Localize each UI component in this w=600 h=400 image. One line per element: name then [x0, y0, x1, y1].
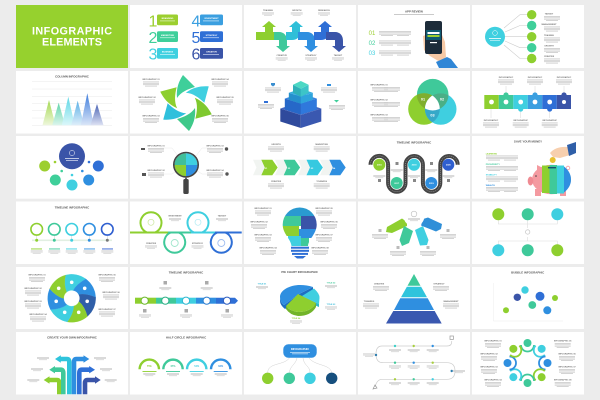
cyan arrow: [286, 21, 303, 36]
text blocks: INFOGRAPHIC 01: [28, 274, 47, 276]
labels: TITLE 03: [327, 304, 336, 306]
teal petal: [400, 226, 413, 246]
text blocks: INFOGRAPHIC 04: [211, 78, 230, 81]
text blocks: INFOGRAPHIC 07: [315, 234, 334, 236]
royal arrow: [314, 21, 332, 36]
milestones: 2020: [446, 164, 452, 166]
milestones: [141, 297, 231, 304]
labels: CREATIVE: [271, 180, 282, 183]
labels: [483, 76, 572, 128]
arrow band: [135, 298, 238, 304]
panel: pie chart: [244, 267, 356, 329]
labels: GROWTH: [271, 144, 281, 146]
text blocks: INFOGRAPHIC 06: [211, 114, 230, 118]
connectors: [498, 220, 557, 245]
text blocks: INFOGRAPHIC 01: [370, 84, 389, 86]
labels: CREATIVE: [146, 242, 157, 245]
loops: [130, 212, 242, 253]
text blocks: INFOGRAPHIC 04: [29, 313, 48, 316]
dots: [375, 345, 453, 380]
path: [375, 341, 455, 387]
bulb base: [291, 247, 309, 258]
heading: TIMELINE INFOGRAPHIC: [397, 140, 432, 144]
circles: [31, 224, 113, 242]
puzzle strip: [484, 92, 571, 112]
panel: winding road: [358, 332, 470, 394]
text blocks: INFOGRAPHIC 01: [254, 207, 273, 210]
panel: magnifier puzzle: [130, 136, 242, 199]
panel: circle timeline: [16, 202, 128, 264]
text blocks: INFOGRAPHIC 01: [142, 78, 161, 81]
connectors: [268, 357, 332, 372]
leaders: [491, 86, 564, 118]
labels: [268, 143, 330, 188]
nodes: [492, 208, 563, 256]
panel: puzzle timeline: [472, 71, 584, 134]
text blocks: INFOGRAPHIC 05: [315, 207, 334, 210]
labels: [142, 371, 228, 376]
panel: ring of arcs: [472, 332, 584, 394]
values: [147, 365, 224, 368]
text blocks: INFOGRAPHIC 02: [147, 169, 166, 172]
milestones: [373, 159, 454, 189]
heading: TIMELINE INFOGRAPHIC: [169, 270, 204, 274]
values: 67%: [171, 365, 176, 368]
labels: INFOGRAPHIC: [499, 76, 514, 79]
end icons: [373, 336, 453, 389]
labels: RESEARCH: [318, 9, 330, 12]
labels: TITLE 02: [327, 282, 336, 284]
text blocks: INFOGRAPHIC 01: [484, 340, 503, 342]
text blocks: INFOGRAPHIC 07: [558, 366, 577, 368]
item 1: [149, 14, 178, 30]
values: 75%: [147, 365, 153, 368]
text blocks: INFOGRAPHIC 02: [250, 220, 269, 224]
venn circles: 01: [421, 98, 425, 102]
labels: [31, 248, 113, 254]
labels: [27, 357, 117, 382]
labels: STRATEGY: [305, 54, 317, 57]
text blocks: INFOGRAPHIC 03: [24, 300, 43, 303]
labels: INFOGRAPHIC: [528, 76, 543, 79]
list: 03: [369, 51, 376, 57]
labels: INFOGRAPHIC: [542, 119, 557, 122]
milestones: 2018: [412, 164, 417, 166]
labels: INFOGRAPHIC: [557, 76, 572, 79]
panel: stepped pyramid: [244, 71, 356, 134]
tier 2: [401, 287, 427, 297]
green petal: [386, 218, 407, 233]
icon: coin and hand: [550, 142, 576, 163]
labels: TARGET: [218, 214, 227, 218]
item 3: BUSINESS: [162, 52, 174, 54]
text blocks: [370, 84, 400, 122]
hub: [59, 143, 85, 169]
icon: piggy bank: [528, 165, 571, 196]
labels: INVESTMENT: [168, 216, 182, 218]
item 4: INVESTMENT: [204, 18, 219, 20]
labels: TITLE 01: [258, 284, 267, 286]
text blocks: INFOGRAPHIC 06: [558, 352, 577, 356]
venn circles: 03: [430, 114, 435, 118]
panel: bubble chart: [472, 267, 584, 329]
item 3: 3: [149, 46, 158, 64]
venn circles: 02: [440, 98, 444, 102]
panel: numbered list: [130, 5, 242, 68]
labels: TOWARDS: [316, 180, 328, 183]
labels: TITLE 04: [292, 317, 301, 320]
icons: [148, 219, 225, 246]
arcs: [140, 360, 230, 369]
list: [486, 152, 518, 192]
text blocks: INFOGRAPHIC 02: [480, 352, 499, 356]
hub: [485, 27, 505, 47]
panel: loop timeline: [130, 202, 242, 264]
list: LEARNING: [486, 152, 497, 156]
labels: STRATEGY: [433, 282, 445, 286]
labels: CREATIVE: [374, 282, 385, 286]
donut segments: [40, 267, 102, 328]
green chevron: 01: [265, 168, 268, 170]
icons: [141, 147, 229, 176]
labels: MARKETING: [315, 143, 328, 146]
venn circles: [408, 79, 457, 125]
teal arrow: [274, 36, 290, 52]
child nodes: [262, 373, 337, 384]
heading: COLUMN INFOGRAPHIC: [55, 74, 90, 78]
item 6: [192, 46, 223, 64]
pinwheel blades: [157, 75, 215, 131]
text blocks: [147, 144, 225, 178]
pale chevrons: [253, 160, 336, 175]
teal chevron: 02: [288, 168, 291, 170]
text blocks: INFOGRAPHIC 01: [147, 144, 166, 148]
milestones: 2019: [429, 183, 435, 185]
tier 3: [394, 298, 434, 310]
text blocks: INFOGRAPHIC 05: [98, 274, 117, 276]
labels: INFOGRAPHIC: [484, 119, 499, 122]
labels: MANAGEMENT: [541, 23, 557, 26]
panel: segmented wheel: [16, 267, 128, 329]
panel: hub and spokes: [472, 5, 584, 68]
text blocks: INFOGRAPHIC 05: [554, 340, 572, 342]
centre circle: [404, 206, 424, 226]
labels: [256, 282, 337, 324]
labels: [139, 281, 233, 318]
road: [370, 156, 458, 192]
text blocks: [258, 83, 345, 110]
text blocks: [24, 274, 121, 322]
axes: [493, 283, 563, 321]
labels: [363, 282, 459, 308]
triangle columns: [42, 93, 104, 125]
leaders: [160, 148, 212, 174]
cyan chevron: 03: [311, 168, 314, 170]
labels: MANAGEMENT: [443, 300, 459, 303]
tier 4: [386, 311, 442, 324]
list: STABILITY: [486, 174, 497, 176]
centre icon: [526, 230, 530, 234]
navy arrow: [326, 36, 346, 52]
text blocks: INFOGRAPHIC 04: [206, 169, 225, 172]
icon: hand holding phone: [423, 21, 458, 68]
panel: pyramid: [358, 267, 470, 329]
heading: PIE CHART INFOGRAPHIC: [281, 270, 319, 274]
panel: title cover: [16, 5, 128, 68]
milestones: 2016: [377, 164, 383, 166]
heading: HALF CIRCLE INFOGRAPHIC: [166, 336, 207, 340]
text blocks: INFOGRAPHIC 03: [480, 366, 499, 368]
text blocks: INFOGRAPHIC 04: [484, 378, 503, 382]
layer 3: [285, 94, 317, 114]
item 1: BRANDING: [162, 17, 174, 20]
panel: column infographic: [16, 71, 128, 134]
text blocks: INFOGRAPHIC 02: [138, 96, 157, 99]
text blocks: INFOGRAPHIC 02: [24, 287, 43, 290]
item 1: 1: [149, 14, 158, 30]
item 2: [149, 30, 178, 47]
labels: [372, 229, 456, 256]
subtitle: ELEMENTS: [42, 36, 102, 48]
grid lines: [32, 81, 112, 125]
heading: TIMELINE INFOGRAPHIC: [55, 206, 90, 210]
labels: GROWTH: [292, 10, 302, 12]
labels: TOWARDS: [364, 300, 375, 303]
values: 62%: [218, 365, 224, 368]
list: WEALTH: [486, 184, 495, 187]
panel: pinwheel: [130, 71, 242, 134]
tier 1: [408, 274, 420, 286]
notes: [373, 162, 454, 182]
list: 01: [369, 31, 376, 37]
layer 4: [280, 102, 321, 128]
labels: [363, 349, 465, 385]
connectors: [504, 15, 527, 58]
item 6: 6: [192, 46, 201, 64]
labels: TARGET: [334, 54, 343, 57]
labels: [541, 12, 560, 64]
panel: puzzle bulb: [244, 202, 356, 264]
text blocks: [138, 78, 235, 123]
panel: road timeline: [358, 136, 470, 199]
text blocks: INFOGRAPHIC 06: [102, 291, 121, 294]
blue chevron: 04: [333, 167, 336, 170]
panel: piggy bank: [472, 136, 584, 199]
panel: arrows flow: [244, 5, 356, 68]
labels: CREATIVE: [544, 55, 555, 58]
subheading: [394, 14, 434, 15]
list: [369, 31, 411, 57]
ring: [504, 339, 552, 387]
panel: bubbles around hub: [16, 136, 128, 199]
text blocks: INFOGRAPHIC 03: [370, 114, 389, 116]
panel: grow arrows: [16, 332, 128, 394]
list: 02: [369, 41, 376, 47]
blue petal: [421, 218, 442, 232]
text blocks: INFOGRAPHIC 02: [370, 98, 389, 102]
heading: CREATE YOUR OWN INFOGRAPHIC: [47, 336, 98, 340]
arrow heads: [44, 355, 101, 384]
green arrow: [256, 21, 276, 40]
top node: INFOGRAPHIC: [291, 347, 309, 351]
layer 1: [293, 81, 309, 97]
panel: chevron process: [244, 136, 356, 199]
bubbles: [503, 286, 558, 314]
panel: app review: [358, 5, 470, 68]
title: INFOGRAPHIC: [32, 26, 112, 38]
item 2: MARKETING: [161, 34, 174, 37]
labels: GROWTH: [544, 46, 554, 48]
bulb puzzle: [282, 207, 317, 246]
labels: TARGET: [545, 12, 554, 16]
pie: [280, 285, 320, 316]
item 4: [192, 14, 223, 30]
arrows: [49, 359, 96, 394]
text blocks: INFOGRAPHIC 06: [320, 220, 339, 224]
panel: tree nodes: [472, 202, 584, 264]
labels: INFOGRAPHIC: [513, 119, 528, 122]
labels: [262, 9, 344, 61]
text blocks: [480, 340, 577, 387]
item 2: 2: [149, 30, 158, 47]
panel: venn diagram: [358, 71, 470, 134]
labels: TRAINING: [544, 34, 554, 37]
panel: org chart: [244, 332, 356, 394]
text blocks: INFOGRAPHIC 03: [206, 144, 225, 148]
milestones: 2017: [394, 183, 400, 185]
text blocks: INFOGRAPHIC 04: [259, 246, 278, 250]
text blocks: INFOGRAPHIC 03: [142, 114, 161, 118]
blue arrow: [298, 36, 318, 52]
text blocks: INFOGRAPHIC 05: [216, 96, 235, 99]
text blocks: INFOGRAPHIC 03: [254, 234, 273, 236]
layer 2: [289, 89, 313, 104]
heading: SAVE YOUR MONEY: [514, 140, 542, 144]
item 5: STRATEGY: [206, 34, 218, 37]
list: PROSPERITY: [486, 164, 500, 166]
item 6: CREATIVE: [206, 51, 217, 54]
heading: APP REVIEW: [405, 10, 423, 14]
nodes: [527, 10, 536, 63]
labels: TRAINING: [263, 9, 273, 12]
connector band: [32, 240, 112, 241]
values: 54%: [194, 365, 200, 368]
labels: STRATEGY: [192, 242, 204, 245]
panel: arrow timeline: [130, 267, 242, 329]
item 5: [192, 30, 223, 47]
cyan petal: [415, 226, 428, 246]
nodes: [39, 160, 104, 190]
labels: CREATIVE: [277, 54, 287, 57]
item 3: [149, 46, 178, 64]
panel: half circles: [130, 332, 242, 394]
panel: petal fan: [358, 202, 470, 264]
text blocks: INFOGRAPHIC 08: [554, 378, 572, 382]
item 5: 5: [192, 30, 201, 47]
text blocks: INFOGRAPHIC 07: [98, 308, 117, 311]
item 4: 4: [192, 14, 201, 30]
text blocks: [250, 207, 339, 255]
text blocks: INFOGRAPHIC 08: [311, 246, 330, 250]
heading: BUBBLE INFOGRAPHIC: [511, 270, 545, 274]
labels: [145, 214, 228, 249]
magnifier: [174, 152, 198, 194]
